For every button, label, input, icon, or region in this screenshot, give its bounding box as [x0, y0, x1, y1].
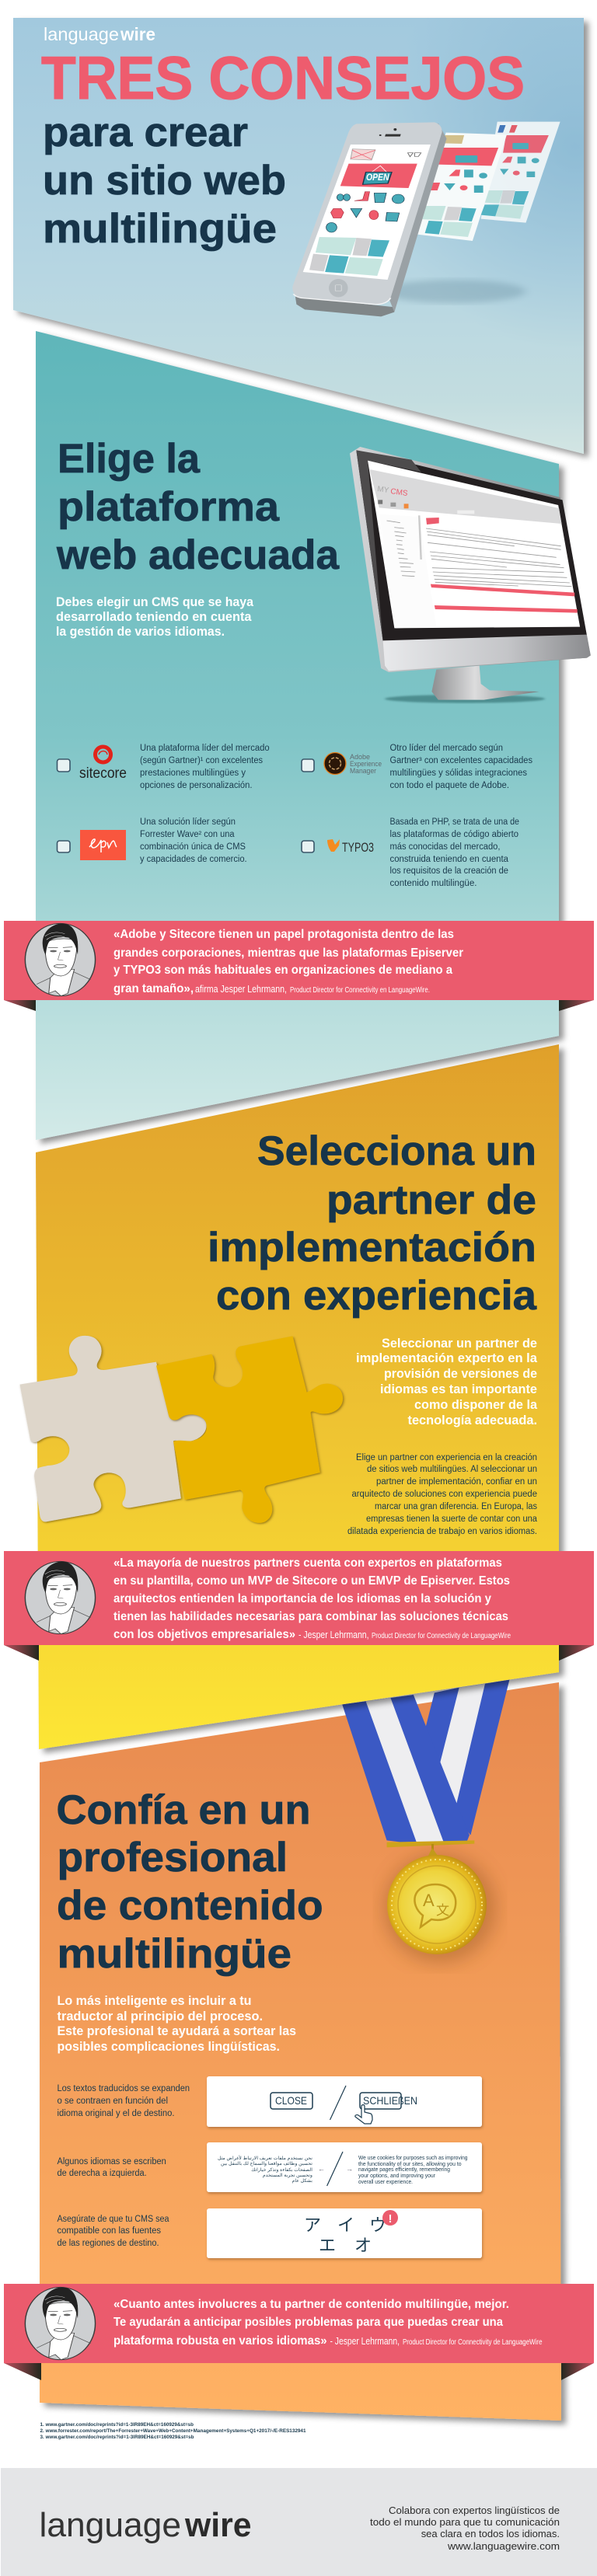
quote text: - Jesper Lehrmann, [298, 1629, 368, 1640]
platform item: Episerver: Una solución líder según [140, 817, 236, 827]
heading: section 2: Selecciona un [257, 1128, 536, 1174]
call to action: todo el mundo para que tu comunicación [370, 2516, 560, 2528]
text block: choosing partner [356, 1337, 538, 1427]
platform item: TYPO3: construida teniendo en cuenta [390, 855, 509, 864]
note: right to left: de derecha a izquierda. [58, 2169, 147, 2178]
quote text: grandes corporaciones, mientras que las plataformas Episerver [113, 946, 463, 960]
logo: Sitecore: sitecore [79, 765, 127, 782]
quote text: gran tamaño», [113, 982, 194, 995]
platform item: Adobe Experience Manager: con todo el paquete de Adobe. [390, 781, 509, 790]
illustration: desktop monitor with CMS [350, 447, 591, 703]
ribbon quote 2 [4, 1551, 594, 1661]
heading: section 1: plataforma [58, 484, 280, 530]
tiles [316, 237, 356, 255]
call to action: Colabora con expertos lingüísticos de [389, 2505, 560, 2516]
card: right-to-left example: الصفحات بكفاءة وتذكر خياراتك [251, 2167, 312, 2173]
note: text expansion [58, 2084, 190, 2118]
heading: section 3: profesional [58, 1835, 288, 1881]
text block: choose a CMS: la gestión de varios idiomas. [56, 625, 225, 639]
ribbon quote 1 [4, 921, 594, 1011]
card: right-to-left example: navigate pages efficiently, remembering [358, 2166, 450, 2173]
logo: TYPO3 [327, 839, 374, 855]
illustration: medal: 文 [436, 1903, 449, 1918]
platform item: TYPO3: los requisitos de la creación de [390, 866, 508, 876]
ribbon quote 3 [4, 2284, 594, 2380]
platform item: Sitecore [58, 744, 270, 790]
note: right to left [58, 2157, 166, 2178]
call to action [370, 2505, 560, 2552]
logo: languagewire [44, 24, 155, 44]
platform item: Sitecore: (según Gartner)¹ con excelentes [140, 756, 263, 765]
logo: languagewire: wire [184, 2506, 252, 2544]
call to action: sea clara en todos los idiomas. [421, 2528, 560, 2539]
text block: partner experience: Elige un partner con experiencia en la creación [356, 1453, 537, 1462]
quote text: «Cuanto antes involucres a tu partner de contenido multilingüe, mejor. [113, 2298, 509, 2311]
card: right-to-left example: نحن نستخدم ملفات تعريف الارتباط لأغراض مثل [218, 2154, 312, 2161]
footnotes [40, 2422, 306, 2440]
text block: partner experience [347, 1453, 538, 1536]
platform item: Adobe Experience Manager [302, 744, 532, 790]
quote text: - Jesper Lehrmann, [330, 2335, 400, 2347]
logo: Adobe Experience Manager [324, 752, 382, 775]
quote text: plataforma robusta en varios idiomas» [113, 2334, 327, 2348]
platform item: Episerver: Forrester Wave² con una [140, 830, 235, 839]
text block: choosing partner: implementación experto en la [356, 1351, 538, 1365]
quote text: Product Director for Connectivity de LanguageWire [403, 2338, 543, 2347]
note: text expansion: Los textos traducidos se expanden [58, 2084, 190, 2093]
heading: section 2: implementación [208, 1225, 536, 1271]
icon: pointing hand [355, 2105, 372, 2124]
card: katakana fonts: オ [354, 2236, 372, 2255]
icon: warning badge: ! [389, 2212, 392, 2226]
call to action: www.languagewire.com [447, 2540, 560, 2552]
card: right-to-left example: بشكل عام [292, 2178, 312, 2184]
card: right-to-left example: We use cookies for purposes such as improving [358, 2154, 468, 2161]
platform item: Episerver [58, 817, 247, 864]
card: right-to-left example: ← [318, 2165, 325, 2173]
quote text: «Adobe y Sitecore tienen un papel protagonista dentro de las [113, 928, 454, 941]
logo: Adobe Experience Manager: Manager [350, 767, 376, 775]
card: katakana fonts: イ [337, 2215, 354, 2235]
text block: choosing partner: Seleccionar un partner de [382, 1337, 537, 1351]
card: right-to-left example: your options, and improving your [358, 2172, 435, 2179]
logo: Sitecore [79, 747, 127, 782]
quote text [113, 1556, 511, 1641]
illustration: medal [342, 1680, 509, 1963]
illustration: smartphones with translated shop pages [292, 122, 560, 316]
subtitle: un sitio web [43, 158, 286, 204]
heading: section 3: de contenido [57, 1883, 323, 1929]
quote text [113, 2298, 543, 2348]
card: close / schließen button: CLOSE [275, 2094, 307, 2107]
heading: section 1 [56, 436, 340, 578]
card: right-to-left example: → [346, 2165, 353, 2173]
heading: section 2 [208, 1128, 537, 1319]
platform item: Episerver: combinación única de CMS [140, 842, 246, 852]
subtitle: multilingüe [43, 206, 277, 252]
text block: choose a CMS: desarrollado teniendo en cuenta [56, 610, 252, 624]
quote text: con los objetivos empresariales» [113, 1628, 295, 1641]
quote text: afirma Jesper Lehrmann, [195, 983, 287, 995]
platform item: TYPO3 [302, 817, 519, 888]
footnotes: 1. www.gartner.com/doc/reprints?id=1-3IR89EH&ct=160929&st=sb [40, 2422, 194, 2428]
icons row 1 [326, 193, 404, 232]
logo: Adobe Experience Manager: Adobe [350, 753, 370, 761]
logo: TYPO3: TYPO3 [342, 840, 374, 855]
illustration: puzzle pieces [19, 1336, 343, 1523]
illustration: smartphones with translated shop pages: OPEN [366, 173, 389, 183]
platform item: Sitecore: opciones de personalización. [140, 781, 252, 790]
text block: partner experience: de sitios web multilingües. Al seleccionar un [367, 1465, 537, 1474]
platform item: Sitecore: Una plataforma líder del mercado [140, 744, 270, 753]
text block: partner experience: empresas tienen la suerte de contar con una [366, 1515, 538, 1524]
quote text: Te ayudarán a anticipar posibles problemas para que puedas crear una [113, 2316, 503, 2329]
subtitle: para crear [43, 110, 248, 155]
panel: section 2, implementation partner [19, 1044, 559, 1749]
quote text: y TYPO3 son más habituales en organizaciones de mediano a [113, 964, 452, 977]
card: right-to-left example: تحسين وظائف مواقعنا والسماح لك بالتنقل بين [221, 2161, 312, 2166]
heading: section 1: Elige la [58, 436, 201, 482]
platform item: TYPO3: las plataformas de código abierto [390, 830, 518, 839]
quote text: tienen las habilidades necesarias para combinar las soluciones técnicas [113, 1610, 508, 1623]
platform item: Sitecore: prestaciones multilingües y [140, 769, 246, 778]
logo: languagewire: language [39, 2506, 181, 2544]
quote text: arquitectos entienden la importancia de los idiomas en la solución y [113, 1592, 491, 1605]
card: katakana fonts: ア [304, 2215, 321, 2235]
portrait: Jesper Lehrmann [25, 1561, 96, 1634]
logo: Adobe Experience Manager: Experience [350, 760, 382, 768]
text block: choosing partner: como disponer de la [414, 1398, 538, 1412]
platform item: TYPO3: más conocidas del mercado, [390, 842, 501, 852]
quote text: Product Director for Connectivity de LanguageWire [372, 1632, 511, 1640]
text block: choose a CMS [56, 595, 254, 639]
text block: choosing partner: idiomas es tan importante [380, 1382, 537, 1396]
platform item: Adobe Experience Manager: Gartner³ con excelentes capacidades [390, 756, 532, 765]
text block: partner experience: arquitecto de soluciones con experiencia puede [351, 1490, 537, 1499]
note: fonts: de las regiones de destino. [58, 2239, 159, 2248]
note: text expansion: o se contraen en función del [58, 2097, 168, 2106]
card: close / schließen button [207, 2076, 482, 2127]
platform item: Adobe Experience Manager: Otro líder del mercado según [390, 744, 503, 753]
portrait: Jesper Lehrmann [25, 2287, 96, 2360]
subtitle [43, 110, 286, 252]
note: fonts [58, 2215, 169, 2248]
heading: section 2: con experiencia [216, 1273, 537, 1319]
card: right-to-left example: the functionality of our sites, allowing you to [358, 2160, 462, 2167]
text block: partner experience: partner de implementación, confiar en un [376, 1477, 537, 1487]
illustration: desktop monitor with CMS: CMS [390, 487, 408, 498]
text block: early involvement: traductor al principio del proceso. [58, 2010, 263, 2024]
quote text: en su plantilla, como un MVP de Sitecore o un EMVP de Episerver. Estos [113, 1574, 510, 1588]
heading: section 3 [56, 1787, 323, 1977]
card: right-to-left example: وتحسين تجربة المستخدم [263, 2173, 312, 2178]
quote text: Product Director for Connectivity en LanguageWire. [290, 986, 430, 995]
illustration: desktop monitor with CMS: MY [377, 485, 389, 495]
heading: section 1: web adecuada [56, 532, 340, 578]
footnotes: 3. www.gartner.com/doc/reprints?id=1-3IR89EH&ct=160929&st=sb [40, 2435, 194, 2440]
panel: header [13, 18, 584, 454]
text block: choosing partner: provisión de versiones de [384, 1367, 537, 1381]
card: right-to-left example: overall user experience. [358, 2178, 413, 2185]
title: TRES CONSEJOS [41, 44, 525, 112]
portrait: Jesper Lehrmann [25, 923, 96, 996]
platform item: TYPO3: Basada en PHP, se trata de una de [390, 817, 519, 827]
note: right to left: Algunos idiomas se escriben [58, 2157, 166, 2166]
logo: languagewire: language [44, 24, 119, 44]
platform item: Adobe Experience Manager: multilingües y sólidas integraciones [390, 769, 527, 778]
heading: section 3: Confía en un [56, 1787, 311, 1833]
panel: section 1, web platform [36, 331, 591, 1140]
text block: choose a CMS: Debes elegir un CMS que se haya [56, 595, 254, 609]
note: fonts: Asegúrate de que tu CMS sea [58, 2215, 169, 2224]
text block: early involvement [58, 1994, 296, 2054]
main phone [295, 297, 394, 316]
heading: section 2: partner de [326, 1177, 536, 1223]
panel: section 3, professional content partner [40, 1680, 561, 2421]
quote text: «La mayoría de nuestros partners cuenta con expertos en plataformas [113, 1556, 502, 1570]
text block: partner experience: dilatada experiencia de trabajo en varios idiomas. [347, 1527, 537, 1536]
illustration: medal: A [423, 1891, 435, 1910]
card: right-to-left example [207, 2142, 482, 2192]
French page [481, 122, 560, 223]
note: fonts: compatible con las fuentes [58, 2226, 161, 2236]
platform item: TYPO3: contenido multilingüe. [390, 879, 477, 888]
logo: languagewire [39, 2506, 252, 2544]
card: katakana fonts [207, 2208, 482, 2258]
icon: warning badge [382, 2210, 398, 2226]
text block: early involvement: Este profesional te ayudará a sortear las [58, 2024, 296, 2038]
text block: partner experience: marcar una gran diferencia. En Europa, las [375, 1502, 537, 1511]
logo: languagewire: wire [120, 24, 155, 44]
card: close / schließen button: SCHLIEßEN [363, 2094, 417, 2107]
text block: early involvement: posibles complicaciones lingüísticas. [58, 2040, 280, 2054]
German page [417, 133, 507, 241]
footnotes: 2. www.forrester.com/report/The+Forrester+Wave+Web+Content+Management+Systems+Q1+2017/-/E-RES132941 [40, 2428, 306, 2434]
quote text [113, 928, 463, 995]
card: katakana fonts: エ [319, 2236, 336, 2255]
text block: early involvement: Lo más inteligente es incluir a tu [58, 1994, 252, 2008]
note: text expansion: idioma original y el de destino. [58, 2109, 174, 2118]
heading: section 3: multilingüe [58, 1931, 292, 1977]
platform item: Episerver: y capacidades de comercio. [140, 855, 247, 864]
logo: Episerver [80, 830, 126, 860]
card: katakana fonts: ウ [369, 2215, 386, 2235]
footer [1, 2468, 597, 2576]
text block: choosing partner: tecnología adecuada. [407, 1413, 537, 1427]
